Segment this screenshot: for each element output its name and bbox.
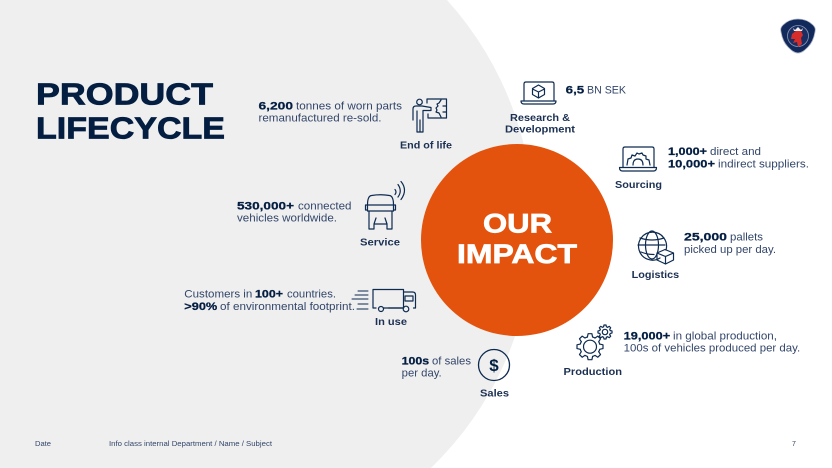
text: sourcing stat: direct and: [710, 146, 761, 158]
text: sales stat: 100s: [402, 355, 429, 367]
text: production stat: 100s of vehicles produced per day.: [624, 343, 800, 355]
text: sourcing stat: indirect suppliers.: [718, 158, 809, 170]
label: research and development: Development: [505, 124, 576, 136]
text: in use stat: >90%: [184, 301, 218, 313]
panel: grey background arc: [0, 0, 534, 468]
center circle: our impact: [421, 144, 613, 336]
center circle: our impact: OUR: [483, 208, 552, 238]
text: in use stat: Customers in: [184, 289, 252, 301]
item: end of life: [258, 99, 452, 152]
footer: info class: Info class internal Department / Name / Subject: [109, 441, 272, 448]
label: in use: In use: [375, 316, 407, 328]
icon: person at board with puzzle: [413, 99, 446, 132]
text: sales stat: of sales: [432, 355, 472, 367]
text: in use stat: countries.: [287, 289, 336, 301]
item: production: [564, 325, 800, 378]
footer: date: Date: [35, 441, 51, 448]
title: [36, 76, 225, 146]
icon: laptop with cube: [521, 82, 556, 104]
item: logistics: [632, 231, 776, 281]
label: sourcing: Sourcing: [615, 179, 662, 191]
title: PRODUCT: [36, 76, 213, 112]
item: research and development: [505, 82, 627, 136]
icon: moving truck: [352, 290, 416, 312]
text: service stat: connected: [298, 200, 352, 212]
icon: laptop with gear: [620, 147, 656, 171]
label: production: Production: [564, 366, 622, 378]
item: sales: [402, 350, 510, 400]
label: end of life: End of life: [400, 140, 452, 152]
text: end of life stat: 6,200: [258, 100, 293, 112]
label: research and development: Research &: [510, 112, 570, 124]
text: end of life stat: remanufactured re-sold.: [258, 113, 382, 125]
text: in use stat: 100+: [255, 289, 283, 301]
icon: globe with parcel: [638, 231, 674, 264]
item: sourcing: [615, 146, 809, 191]
footer: page number: 7: [792, 441, 796, 448]
text: logistics stat: pallets: [730, 232, 764, 244]
label: sales: Sales: [480, 388, 509, 400]
text: logistics stat: picked up per day.: [684, 244, 776, 256]
text: R&D stat: 6,5: [566, 84, 584, 96]
item: service: [237, 182, 404, 248]
logo: Scania griffin: [781, 19, 815, 53]
label: service: Service: [360, 236, 400, 248]
text: in use stat: of environmental footprint.: [220, 301, 355, 313]
label: logistics: Logistics: [632, 269, 679, 281]
text: end of life stat: tonnes of worn parts: [296, 100, 403, 112]
text: sourcing stat: 1,000+: [668, 146, 707, 158]
text: sourcing stat: 10,000+: [668, 158, 715, 170]
icon: connected truck front: [366, 182, 404, 229]
text: logistics stat: 25,000: [684, 232, 727, 244]
icon: gears: [577, 325, 612, 360]
text: service stat: 530,000+: [237, 200, 294, 212]
text: production stat: in global production,: [673, 330, 777, 342]
icon: dollar coin: $: [489, 356, 499, 375]
text: R&D stat: BN SEK: [587, 84, 627, 96]
center circle: our impact: IMPACT: [457, 239, 578, 269]
text: sales stat: per day.: [402, 368, 442, 380]
text: service stat: vehicles worldwide.: [237, 212, 337, 224]
text: production stat: 19,000+: [624, 330, 670, 342]
title: LIFECYCLE: [36, 110, 225, 146]
item: in use: [184, 289, 416, 328]
